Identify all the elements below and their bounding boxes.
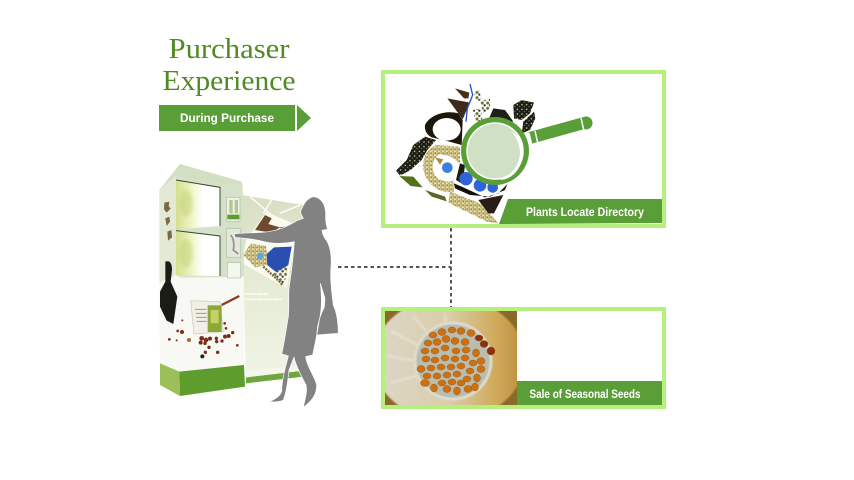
title — [162, 33, 296, 97]
panel: sale of seasonal seeds — [373, 297, 664, 421]
kiosk screens — [176, 180, 220, 229]
kiosk poster figure — [160, 261, 177, 324]
wall map — [242, 212, 297, 288]
kiosk side panels — [227, 197, 240, 221]
magnifying glass — [461, 116, 592, 185]
backdrop wall — [242, 195, 303, 383]
dotted connector — [338, 228, 451, 307]
site plan map — [396, 84, 535, 223]
banner: Sale of Seasonal Seeds — [530, 389, 640, 401]
kiosk scattered seeds — [168, 319, 239, 358]
woman silhouette — [234, 197, 338, 407]
panel: plants locate directory — [383, 72, 664, 226]
title: Experience — [162, 65, 296, 97]
kiosk body — [159, 164, 245, 396]
kiosk base — [160, 363, 180, 396]
seed bowl photo — [373, 297, 525, 421]
kiosk calligraphy — [164, 202, 172, 241]
banner: Plants Locate Directory — [526, 207, 645, 219]
title: Purchaser — [168, 33, 290, 65]
arrow banner: during purchase: During Purchase — [180, 113, 274, 125]
illustration: kiosk with purchaser — [159, 164, 338, 407]
banner — [517, 381, 662, 405]
kiosk leaflet — [191, 301, 223, 334]
arrow banner: during purchase — [159, 105, 311, 131]
banner — [499, 199, 662, 224]
